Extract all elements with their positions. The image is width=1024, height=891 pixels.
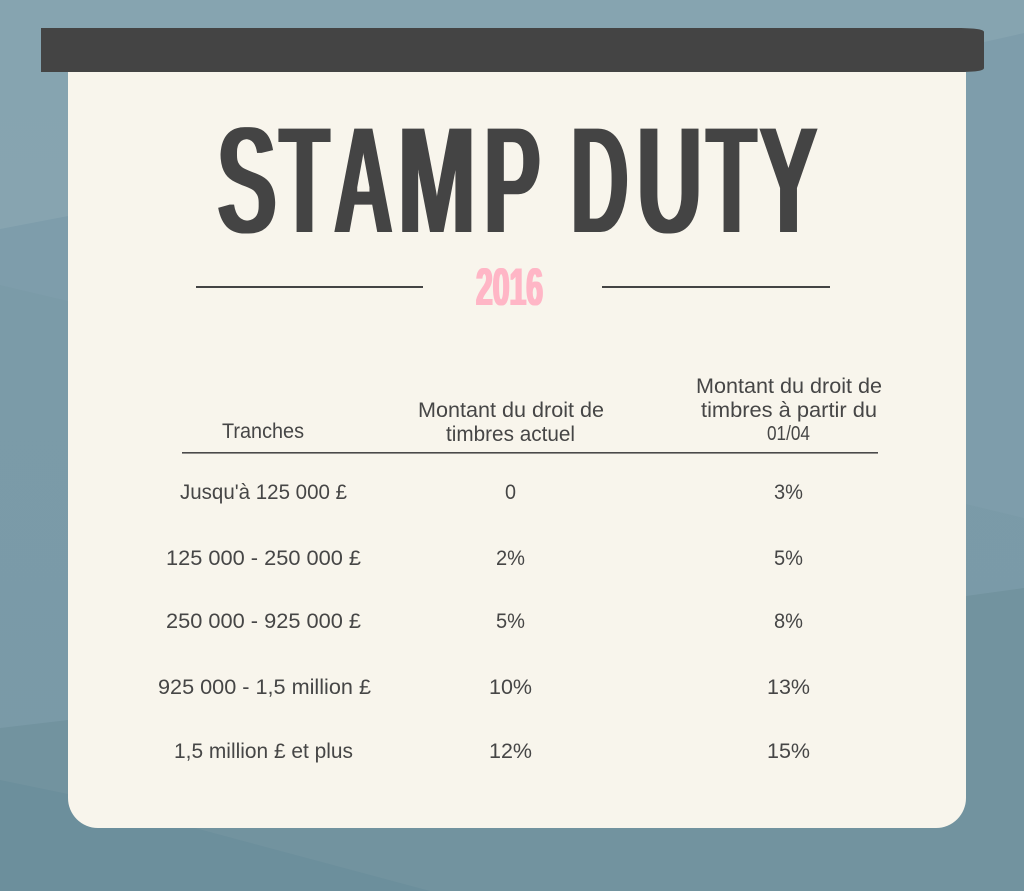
title: S: [217, 93, 277, 267]
table header: Tranches: [222, 420, 304, 443]
row 1: 3%: [774, 481, 803, 504]
row 4: 13%: [767, 676, 810, 699]
table header: Montant du droit de: [418, 399, 604, 422]
title: P: [484, 92, 540, 268]
table header: timbres à partir du: [701, 399, 877, 422]
row 2: 125 000 - 250 000 £: [166, 547, 361, 570]
table header: 01/04: [767, 423, 810, 445]
title: T: [280, 94, 329, 268]
title: A: [334, 94, 393, 268]
row 5: 12%: [489, 740, 532, 763]
subtitle: year with rules: 2016: [476, 258, 543, 317]
row 3: 8%: [774, 610, 803, 633]
row 1: [180, 481, 803, 504]
row 4: [158, 676, 810, 699]
table header: Montant du droit de: [696, 375, 882, 398]
row 4: 10%: [489, 676, 532, 699]
row 3: 5%: [496, 610, 525, 633]
row 2: 5%: [774, 547, 803, 570]
row 3: 250 000 - 925 000 £: [166, 610, 361, 633]
row 3: [166, 610, 803, 633]
row 2: [166, 547, 803, 570]
header bar: [41, 28, 984, 72]
title: M: [398, 94, 476, 268]
title: Y: [758, 93, 818, 267]
title: D: [571, 94, 628, 268]
title: T: [706, 94, 756, 268]
panel: paper card: [68, 72, 966, 828]
row 1: Jusqu'à 125 000 £: [180, 481, 347, 504]
row 5: [174, 740, 810, 763]
row 2: 2%: [496, 547, 525, 570]
table header: [182, 375, 882, 454]
table header: timbres actuel: [446, 423, 575, 446]
table: [158, 375, 882, 763]
row 5: 1,5 million £ et plus: [174, 740, 353, 763]
row 5: 15%: [767, 740, 810, 763]
row 1: 0: [505, 481, 516, 504]
title: U: [637, 93, 702, 267]
title: [217, 92, 818, 268]
row 4: 925 000 - 1,5 million £: [158, 676, 371, 699]
